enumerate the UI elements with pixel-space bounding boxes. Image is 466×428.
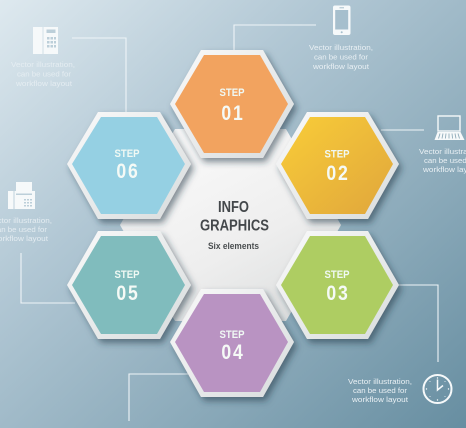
caption: smartphone: can be used for [314, 52, 368, 62]
center title line 2: GRAPHICS [200, 218, 269, 234]
icon: smartphone [333, 6, 350, 35]
step 04: 04 [221, 340, 245, 364]
caption: desk phone: can be used for [17, 70, 71, 78]
step 04: STEP [220, 329, 244, 341]
caption: laptop [419, 147, 466, 174]
center title: INFO [218, 199, 249, 216]
step 03: 03 [326, 281, 350, 305]
step 01 [170, 50, 294, 158]
caption: clock: workflow layout [351, 395, 409, 404]
icon: clock [424, 375, 452, 403]
step 06 [67, 112, 191, 219]
caption: smartphone: workflow layout [312, 62, 370, 71]
step 05: 05 [116, 281, 140, 305]
center subtitle: Six elements [208, 241, 259, 251]
step 02: 02 [326, 161, 350, 185]
step 03 [276, 231, 399, 339]
icon: desk phone [33, 27, 58, 54]
step 05 [67, 231, 191, 339]
step 04 [170, 289, 294, 397]
step 01: STEP [220, 87, 244, 99]
step 03: STEP [324, 269, 350, 281]
caption: fax [0, 216, 52, 243]
caption: desk phone: Vector illustration, [11, 60, 75, 69]
icon: fax [8, 182, 35, 209]
caption: desk phone [11, 60, 75, 88]
caption: clock: Vector illustration, [348, 377, 412, 386]
step 01: 01 [221, 101, 245, 125]
caption: smartphone: Vector illustration, [309, 43, 373, 52]
caption: desk phone: workflow layout [15, 79, 73, 88]
center hexagon [120, 129, 341, 321]
step 02: STEP [324, 148, 350, 160]
caption: clock: can be used for [353, 386, 407, 395]
step 06: 06 [116, 159, 140, 183]
icon: laptop [434, 116, 464, 140]
step 02 [276, 112, 399, 219]
step 06: STEP [114, 148, 140, 160]
caption: clock [348, 377, 412, 404]
step 05: STEP [114, 269, 140, 281]
caption: smartphone [309, 43, 373, 71]
